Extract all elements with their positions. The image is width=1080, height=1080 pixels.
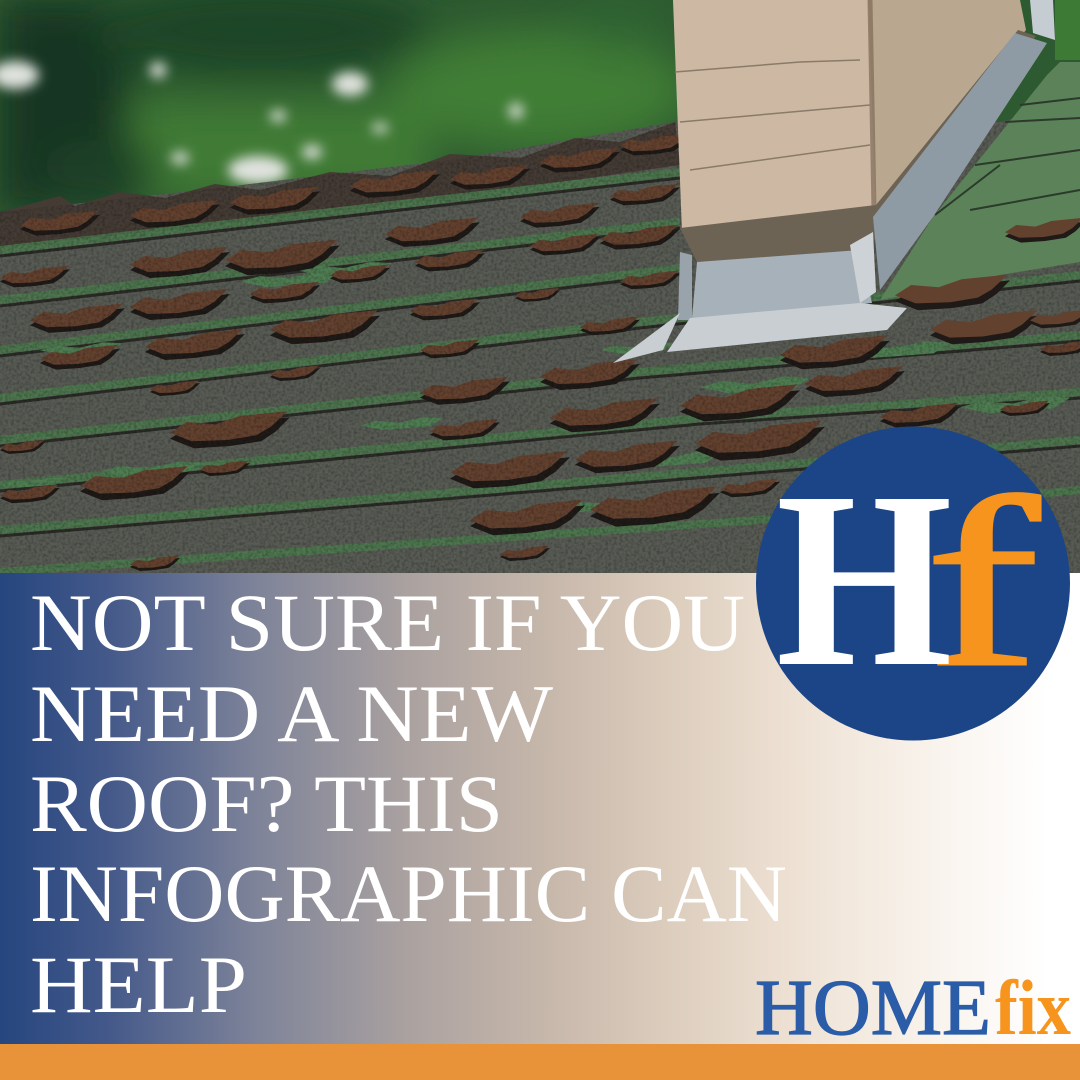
logo: Hf circle badge: H — [776, 439, 952, 719]
trees background — [0, 0, 1080, 240]
logo: Hf circle badge — [756, 426, 1070, 740]
title — [30, 577, 787, 1030]
photo: damaged roof with chimney — [0, 0, 1080, 573]
roof grain texture — [0, 100, 1080, 580]
green remnant patches — [0, 262, 1070, 515]
logo: Hf circle badge: f — [925, 449, 1043, 717]
roof surface — [0, 100, 1080, 580]
green shingles right of chimney — [880, 62, 1080, 344]
metal flashing — [613, 0, 1055, 363]
title: NOT SURE IF YOU — [30, 577, 745, 668]
title: INFOGRAPHIC CAN — [30, 848, 787, 939]
dark torn ridge edge — [0, 122, 680, 248]
title: ROOF? THIS — [30, 758, 503, 849]
orange footer bar — [0, 1044, 1080, 1080]
gradient title band — [0, 573, 1080, 1044]
roof course lines — [0, 172, 1080, 572]
title: HELP — [30, 939, 247, 1030]
title: NEED A NEW — [30, 668, 554, 759]
torn brown shingle patches — [0, 134, 1080, 571]
chimney — [673, 0, 1036, 262]
